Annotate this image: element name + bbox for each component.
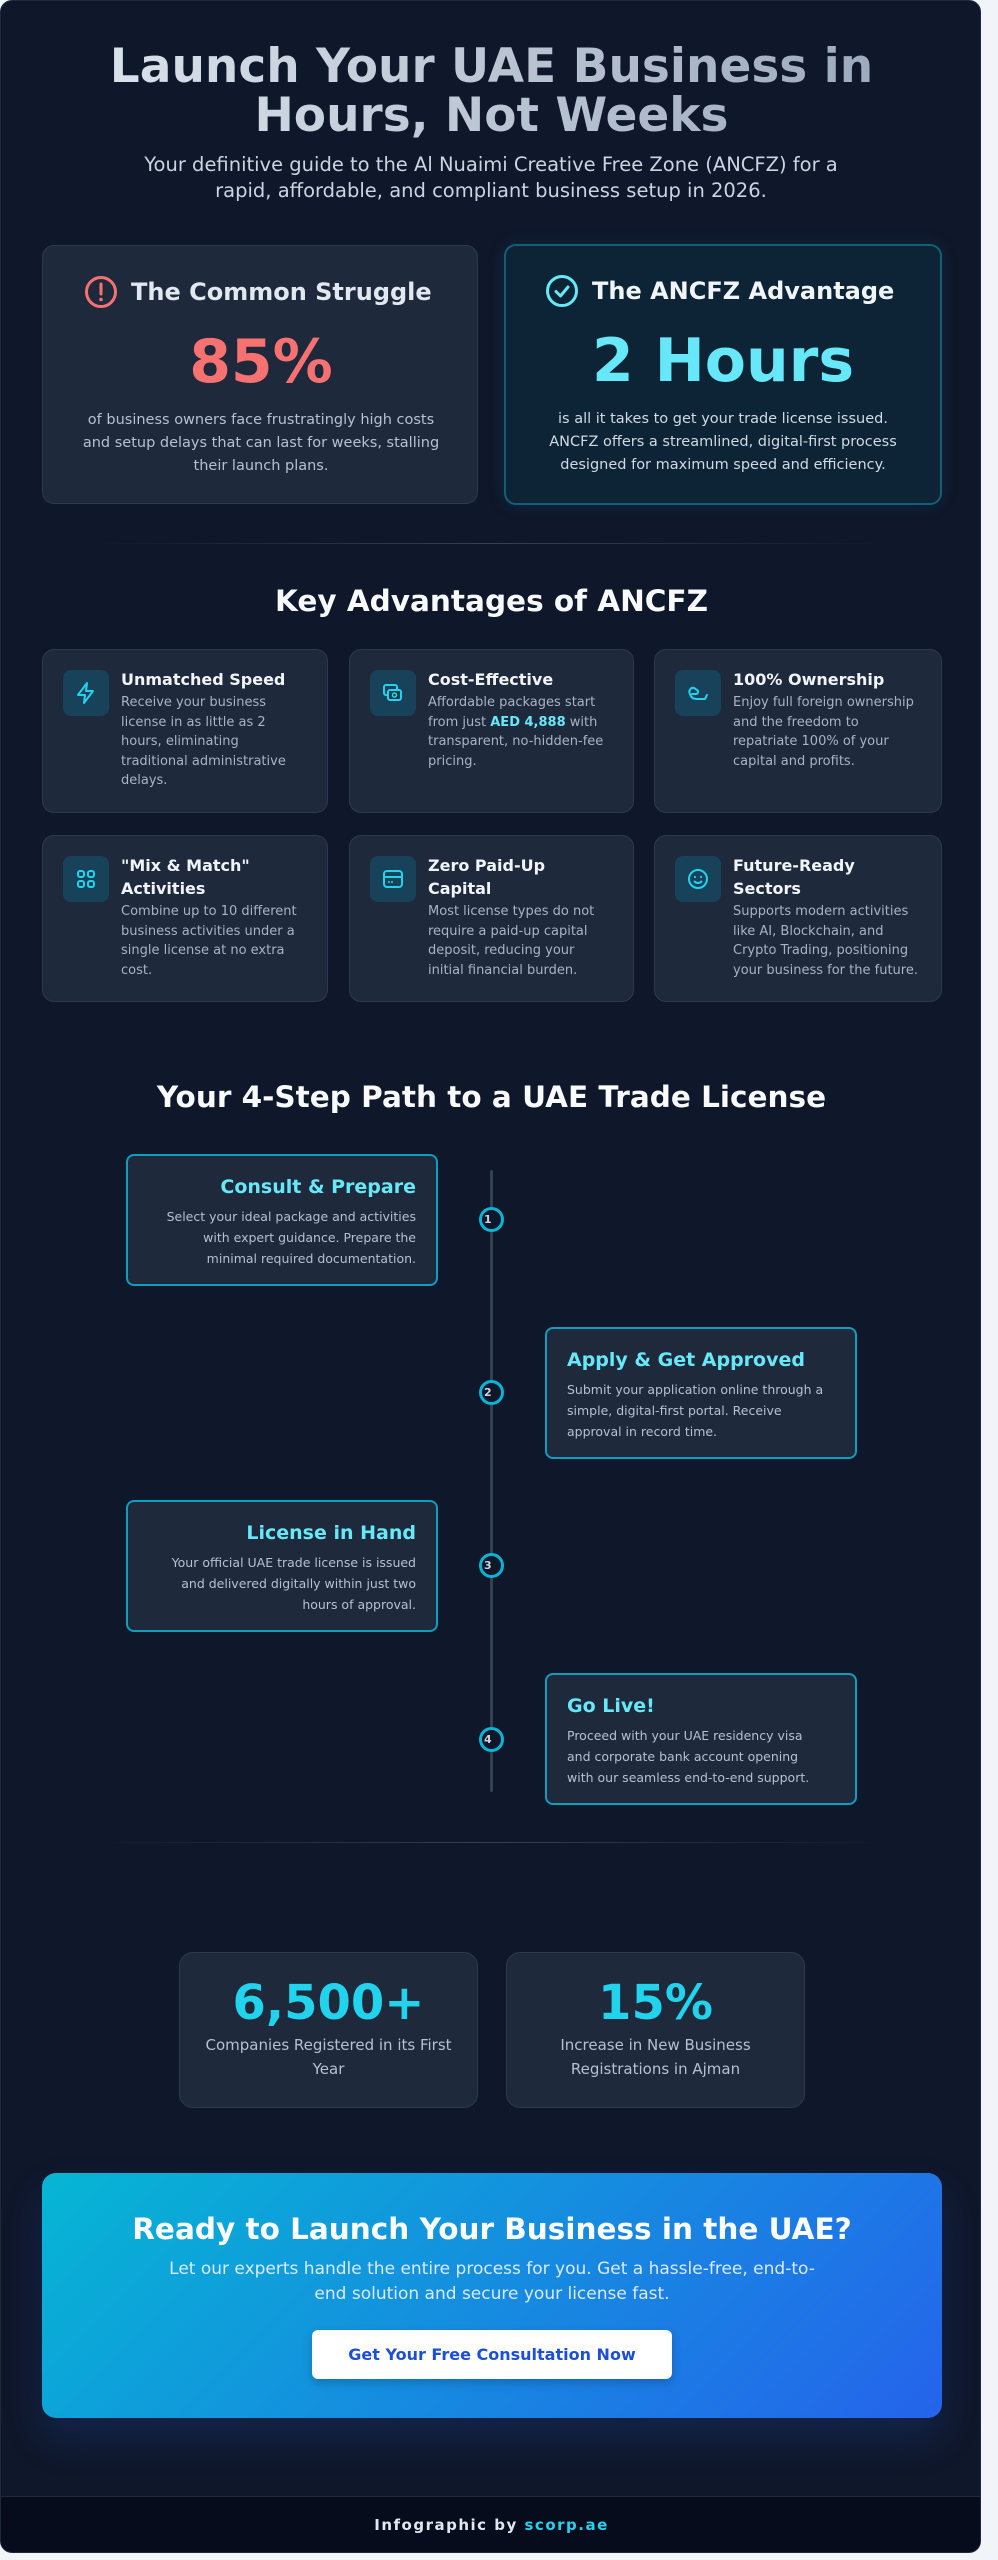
panel: advantages grid <box>42 649 942 1002</box>
icon: exclamation <box>85 276 117 308</box>
card: mix & match <box>42 835 328 1002</box>
CTA button <box>312 2330 672 2379</box>
card: unmatched speed: Unmatched Speed <box>121 670 285 689</box>
icon: lightning <box>63 670 109 716</box>
big number: 85% <box>189 327 333 397</box>
card: cost-effective: Cost-Effective <box>428 670 553 689</box>
icon: card <box>370 856 416 902</box>
title <box>1 42 982 140</box>
card: future-ready: Future-Ready Sectors <box>733 856 855 898</box>
step 4: go live <box>545 1673 857 1805</box>
card: future-ready: Supports modern activities like AI, Blockchain, and Crypto Trading, positioning your business for the future. <box>733 904 918 978</box>
stat: companies: 6,500+ <box>232 1975 425 2031</box>
step 3: license: License in Hand <box>246 1522 416 1544</box>
step 2: apply <box>545 1327 857 1459</box>
heading: The ANCFZ Advantage <box>592 277 894 305</box>
heading: 4-step path: Your 4-Step Path to a UAE Trade License <box>157 1080 826 1114</box>
step 3 marker <box>479 1553 504 1578</box>
stat: increase <box>506 1952 805 2108</box>
heading: The Common Struggle <box>131 278 432 306</box>
callout: CTA <box>42 2173 942 2418</box>
card: ownership: 100% Ownership <box>733 670 884 689</box>
big number: 2 Hours <box>592 326 854 396</box>
card: cost-effective <box>349 649 634 813</box>
footer <box>1 2496 982 2554</box>
step 2: apply: Submit your application online through a simple, digital-first portal. Receive approval in record time. <box>567 1382 823 1439</box>
panel: ANCFZ advantage <box>504 244 942 505</box>
CTA text: Let our experts handle the entire process for you. Get a hassle-free, end-to-end solution and secure your license fast. <box>169 2259 815 2304</box>
icon: check <box>546 275 578 307</box>
stat: companies: Companies Registered in its First Year <box>205 2036 452 2078</box>
icon: smile <box>675 856 721 902</box>
step 1: consult: Consult & Prepare <box>220 1176 416 1198</box>
step 1 marker: 1 <box>484 1213 492 1226</box>
subtitle <box>144 153 838 202</box>
stat: companies <box>179 1952 478 2108</box>
card: cost-effective: Affordable packages start from just AED 4,888 with transparent, no-hidden-fee pricing. <box>428 695 603 768</box>
step 1: consult <box>126 1154 438 1286</box>
CTA button: Get Your Free Consultation Now <box>348 2345 636 2364</box>
step 2 marker <box>479 1380 504 1405</box>
description: of business owners face frustratingly high costs and setup delays that can last for weeks, stalling their launch plans. <box>83 412 439 474</box>
step 4 marker: 4 <box>484 1733 492 1746</box>
card: ownership: Enjoy full foreign ownership and the freedom to repatriate 100% of your capital and profits. <box>733 695 914 768</box>
card: zero capital <box>349 835 634 1002</box>
CTA heading: Ready to Launch Your Business in the UAE? <box>132 2212 852 2246</box>
icon: grid <box>63 856 109 902</box>
card: unmatched speed: Receive your business license in as little as 2 hours, eliminating traditional administrative delays. <box>121 695 286 788</box>
step 4 marker <box>479 1727 504 1752</box>
card: zero capital: Most license types do not require a paid-up capital deposit, reducing your initial financial burden. <box>428 904 594 978</box>
step 1: consult: Select your ideal package and activities with expert guidance. Prepare the minimal required documentation. <box>167 1209 416 1266</box>
subtitle: rapid, affordable, and compliant business setup in 2026. <box>215 179 767 202</box>
step 2: apply: Apply & Get Approved <box>567 1349 805 1371</box>
step 1 marker <box>479 1207 504 1232</box>
icon: money <box>370 670 416 716</box>
card: unmatched speed <box>42 649 328 813</box>
panel: common struggle <box>42 245 478 504</box>
step 2 marker: 2 <box>484 1386 492 1399</box>
card: zero capital: Zero Paid-Up Capital <box>428 856 545 898</box>
card: future-ready <box>654 835 942 1002</box>
timeline <box>490 1170 493 1792</box>
subtitle: Your definitive guide to the Al Nuaimi Creative Free Zone (ANCFZ) for a <box>144 153 838 176</box>
description: is all it takes to get your trade license issued. ANCFZ offers a streamlined, digital-first process designed for maximum speed and efficiency. <box>549 411 897 473</box>
step 4: go live: Proceed with your UAE residency visa and corporate bank account opening with our seamless end-to-end support. <box>567 1728 809 1785</box>
step 3 marker: 3 <box>484 1559 492 1572</box>
step 3: license: Your official UAE trade license is issued and delivered digitally within just two hours of approval. <box>172 1555 416 1612</box>
icon: hand <box>675 670 721 716</box>
stat: increase: 15% <box>598 1975 713 2031</box>
heading: key advantages: Key Advantages of ANCFZ <box>275 584 708 618</box>
title: Hours, Not Weeks <box>254 88 729 143</box>
title: Launch Your UAE Business in <box>110 39 873 94</box>
step 4: go live: Go Live! <box>567 1695 655 1717</box>
card: mix & match: Combine up to 10 different business activities under a single license at no extra cost. <box>121 904 297 978</box>
card: mix & match: "Mix & Match" Activities <box>121 856 250 898</box>
card: ownership <box>654 649 942 813</box>
stat: increase: Increase in New Business Registrations in Ajman <box>560 2036 751 2078</box>
step 3: license <box>126 1500 438 1632</box>
footer: Infographic by scorp.ae <box>374 2516 609 2534</box>
